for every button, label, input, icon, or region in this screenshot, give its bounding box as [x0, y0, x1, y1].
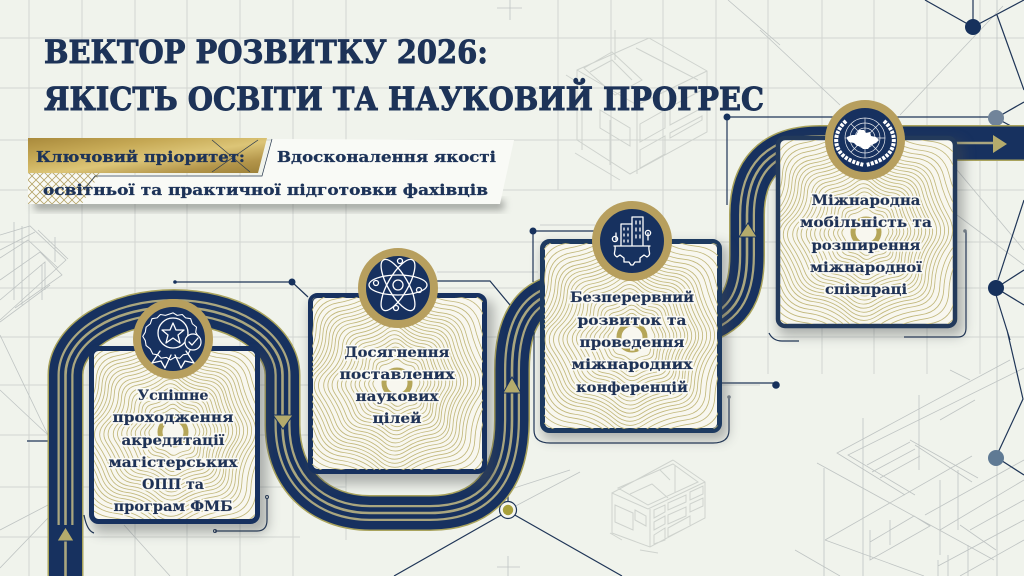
- icon: city and gear: [596, 205, 668, 277]
- card 1 text: магістерських: [108, 455, 239, 471]
- banner outline accents: [84, 139, 272, 190]
- card 2 text: поставлених: [340, 367, 456, 383]
- arrow: down on first bend: [273, 415, 293, 429]
- card 3 text: проведення: [580, 335, 685, 351]
- blueprint building: top centre: [566, 30, 707, 180]
- banner text line one: Вдосконалення якості: [277, 149, 497, 166]
- card 2 text: [340, 345, 456, 427]
- card 3 text: конференцій: [576, 380, 688, 396]
- card 3 text: розвиток та: [578, 313, 687, 329]
- card 4 text: мобільність та: [800, 215, 932, 231]
- card 2: research goals: [304, 293, 500, 490]
- card 1 text: програм ФМБ: [114, 499, 232, 515]
- card 4 text: розширення: [812, 238, 921, 254]
- icon: atom: [362, 252, 434, 324]
- network nodes: [724, 19, 1004, 466]
- crosshair marks: [497, 0, 522, 576]
- arrow: road start: [57, 527, 74, 541]
- card 4 text: [800, 193, 932, 298]
- card 2 text: цілей: [372, 411, 422, 427]
- title: ВЕКТОР РОЗВИТКУ 2026:: [44, 33, 488, 71]
- network line: bottom node links: [394, 490, 622, 576]
- card 3 text: [570, 290, 694, 396]
- card 1 text: проходження: [112, 410, 234, 426]
- card 1: accreditation: [86, 346, 274, 540]
- connector lines around cards: [84, 228, 967, 533]
- title: [44, 33, 764, 118]
- banner: key priority: [28, 138, 514, 210]
- gold label text: Ключовий пріоритет:: [36, 149, 245, 166]
- arrow: up toward fourth card: [739, 223, 757, 237]
- node: gold ringed junction: [500, 502, 516, 518]
- card 1 text: [108, 388, 239, 515]
- card 1 text: ОПП та: [142, 477, 204, 493]
- white banner panel: [28, 139, 514, 204]
- blueprint building: top left: [0, 222, 68, 322]
- card 3: conferences: [536, 238, 734, 446]
- title: ЯКІСТЬ ОСВІТИ ТА НАУКОВИЙ ПРОГРЕС: [44, 78, 764, 118]
- card 3 text: міжнародних: [572, 357, 694, 373]
- card 4 text: Міжнародна: [812, 193, 921, 209]
- card 2 text: Досягнення: [344, 345, 450, 361]
- blueprint building: bottom centre: [610, 460, 705, 553]
- card 4 text: співпраці: [825, 282, 907, 298]
- arrow: road end: [993, 135, 1007, 153]
- card 4: international cooperation: [772, 136, 970, 342]
- icon: accreditation medal: [137, 303, 209, 375]
- hatched corner: [28, 173, 100, 204]
- icon: United Nations emblem: [829, 104, 901, 176]
- gold label strip: [28, 138, 267, 173]
- arrow: up toward third card: [503, 377, 521, 393]
- card 3 text: Безперервний: [570, 290, 694, 306]
- card 4 text: міжнародної: [810, 260, 923, 276]
- card 2 text: наукових: [356, 389, 440, 405]
- road path: [66, 143, 1024, 576]
- banner text line two: освітньої та практичної підготовки фахівців: [43, 182, 488, 199]
- card 1 text: акредитації: [122, 433, 225, 449]
- blueprint building: bottom right: [795, 0, 1024, 576]
- card 1 text: Успішне: [138, 388, 208, 404]
